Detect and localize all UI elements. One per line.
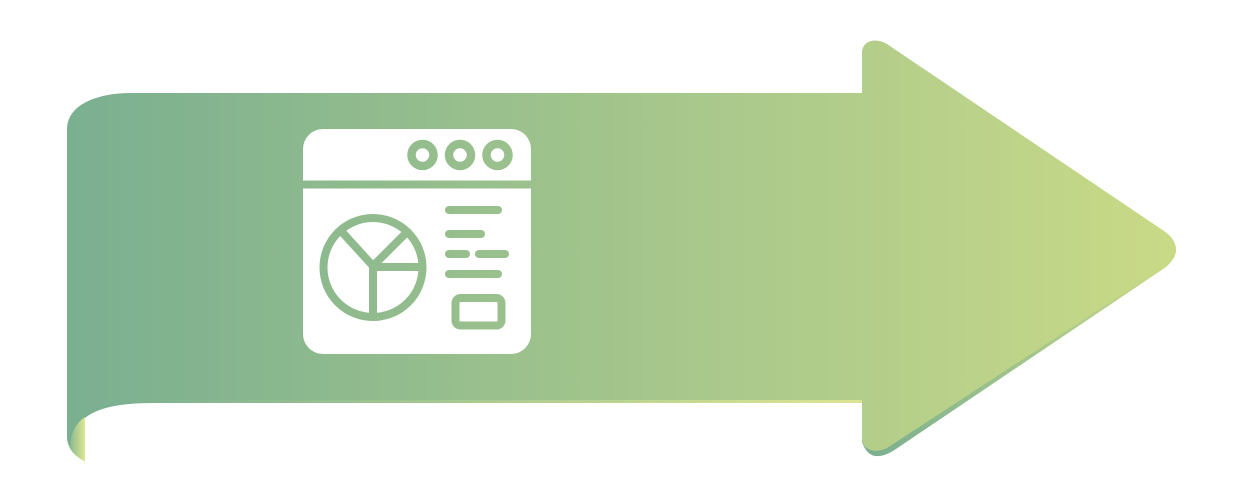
window panel bbox=[303, 129, 531, 354]
icon: dashboard window bbox=[303, 129, 531, 354]
arrow head underside shadow bbox=[862, 250, 1176, 456]
ribbon bottom edge strip bbox=[85, 380, 862, 418]
title bar divider bbox=[303, 180, 531, 188]
pie chart bbox=[324, 218, 422, 317]
button bbox=[456, 298, 502, 326]
arrow bbox=[67, 41, 1176, 462]
ribbon curl bbox=[67, 410, 85, 462]
window buttons bbox=[412, 144, 508, 166]
text lines bbox=[449, 210, 505, 274]
arrow body bbox=[67, 41, 1176, 451]
